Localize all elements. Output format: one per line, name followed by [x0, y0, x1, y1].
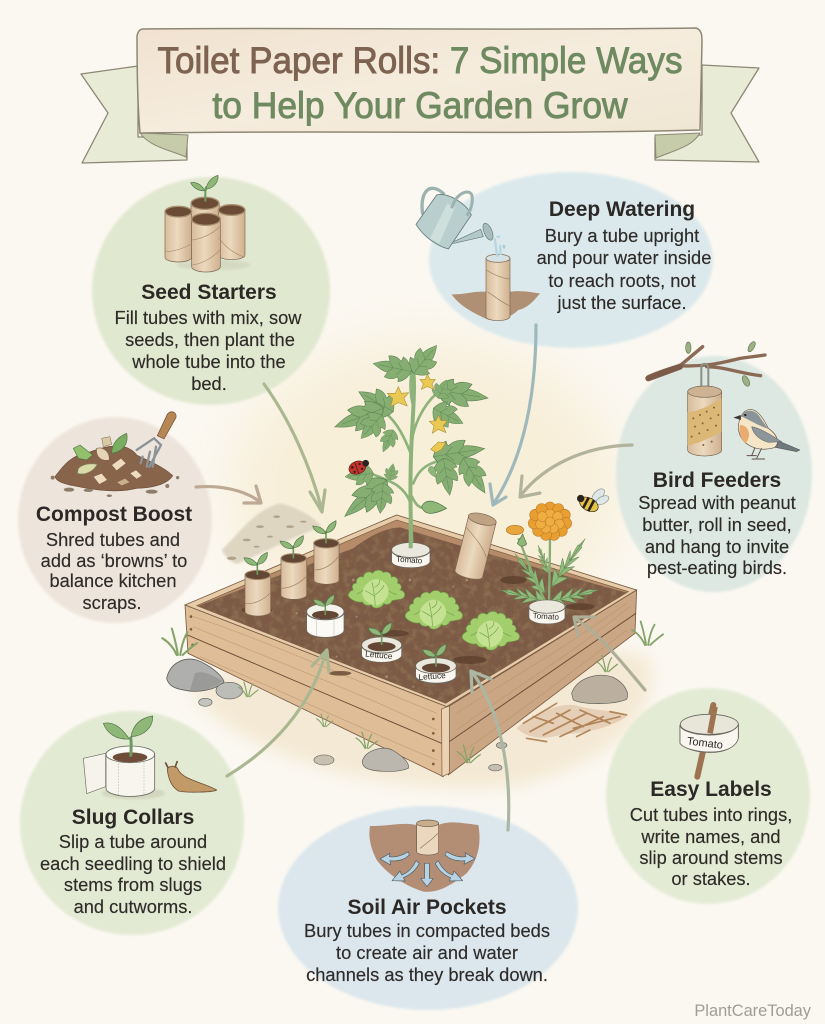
text: compost boost: scraps. — [83, 592, 141, 613]
text: easy labels: Cut tubes into rings, — [630, 804, 792, 825]
panel: seed starters — [92, 175, 330, 405]
lettuce plants — [348, 570, 520, 650]
text: seed starters: seeds, then plant the — [125, 329, 295, 350]
heading: bird feeders: Bird Feeders — [653, 469, 781, 492]
icon: compost pile with fork — [51, 412, 179, 497]
text: bird feeders: butter, roll in seed, — [642, 514, 792, 535]
heading: easy labels: Easy Labels — [650, 778, 772, 801]
text: deep watering: and pour water inside — [537, 247, 711, 268]
text: slug collars: stems from slugs — [64, 874, 202, 895]
slug collar in bed — [307, 595, 344, 637]
icon: bird feeder on branch with bird — [648, 340, 800, 459]
text: bird feeders: Spread with peanut — [638, 492, 796, 513]
icon: tomato ring label on stake — [680, 705, 738, 777]
text: compost boost: balance kitchen — [49, 570, 177, 591]
rocks and grass around bed — [162, 622, 663, 771]
bee — [574, 479, 614, 518]
title text — [158, 39, 682, 126]
text: bird feeders: and hang to invite — [645, 536, 789, 557]
marigold ring label — [529, 600, 565, 624]
panel: compost boost — [18, 412, 212, 623]
text: seed starters: Fill tubes with mix, sow — [115, 307, 302, 328]
panel: slug collars — [20, 711, 244, 935]
arrow: deep watering to tube — [490, 325, 536, 505]
text: slug collars: each seedling to shield — [40, 853, 226, 874]
title banner — [81, 28, 759, 163]
lettuce ring label one — [362, 622, 402, 662]
ladybug — [347, 457, 371, 477]
panel: bird feeders — [616, 340, 812, 592]
panel: easy labels — [606, 688, 810, 904]
raised bed — [185, 515, 637, 777]
text: bird feeders: pest-eating birds. — [647, 557, 787, 578]
text: easy labels: slip around stems — [639, 847, 783, 868]
heading: soil air pockets: Soil Air Pockets — [347, 896, 507, 919]
panel: soil air pockets — [278, 806, 578, 1010]
text: compost boost: add as ‘browns’ to — [41, 550, 187, 571]
text: easy labels: or stakes. — [671, 868, 751, 889]
lettuce ring label two — [416, 644, 456, 683]
text: easy labels: write names, and — [640, 826, 781, 847]
title text: Toilet Paper Rolls: 7 Simple Ways — [158, 39, 682, 81]
text: seed starters: bed. — [191, 373, 227, 394]
watercolor wash behind garden — [190, 340, 651, 788]
tomato ring label: Tomato — [396, 555, 423, 566]
tomato ring label — [392, 520, 430, 568]
text: soil air pockets: channels as they break down. — [306, 964, 548, 985]
tilted deep-watering tube — [454, 511, 497, 581]
arrow: compost to pile — [196, 486, 261, 503]
heading: seed starters: Seed Starters — [141, 281, 277, 304]
compost mound behind the bed — [222, 503, 322, 564]
arrow: bird feeders to bed — [520, 445, 632, 497]
marigold plant — [498, 502, 601, 610]
marigold ring label: Tomato — [533, 611, 560, 622]
icon: seed starter tubes — [165, 175, 250, 272]
text: deep watering: Bury a tube upright — [545, 225, 699, 246]
icon: watering can and tube — [416, 188, 540, 321]
text: soil air pockets: to create air and water — [336, 942, 518, 963]
heading: compost boost: Compost Boost — [36, 503, 192, 526]
text: soil air pockets: Bury tubes in compacted beds — [304, 920, 550, 941]
text: deep watering: just the surface. — [556, 292, 687, 313]
heading: deep watering: Deep Watering — [549, 198, 695, 221]
arrow: easy labels to bed — [574, 617, 645, 690]
central garden bed illustration — [162, 337, 663, 777]
text: compost boost: Shred tubes and — [46, 529, 180, 550]
lettuce ring label two: Lettuce — [418, 670, 446, 682]
arrow: slug collars to bed — [227, 650, 329, 776]
text: seed starters: whole tube into the — [131, 351, 286, 372]
panel: deep watering — [416, 172, 713, 348]
watermark: PlantCareToday — [694, 1002, 812, 1020]
icon: buried tube with air arrows — [369, 820, 480, 892]
arrow: seed starters to bed — [264, 384, 325, 512]
icon: tomato ring label on stake: Tomato — [686, 735, 724, 752]
arrow: soil air pockets to bed — [471, 671, 509, 830]
icon: slug collar with seedling and slug — [83, 716, 217, 799]
title text: to Help Your Garden Grow — [212, 84, 628, 126]
text: slug collars: Slip a tube around — [59, 831, 207, 852]
banner body — [137, 28, 702, 133]
seedling tubes row — [244, 521, 339, 616]
text: deep watering: to reach roots, not — [548, 270, 696, 291]
heading: slug collars: Slug Collars — [72, 806, 194, 829]
lettuce ring label one: Lettuce — [365, 649, 393, 661]
banner left tail — [81, 66, 187, 163]
banner right tail — [655, 65, 759, 162]
tomato plant with flowers — [330, 337, 495, 548]
text: slug collars: and cutworms. — [74, 896, 192, 917]
